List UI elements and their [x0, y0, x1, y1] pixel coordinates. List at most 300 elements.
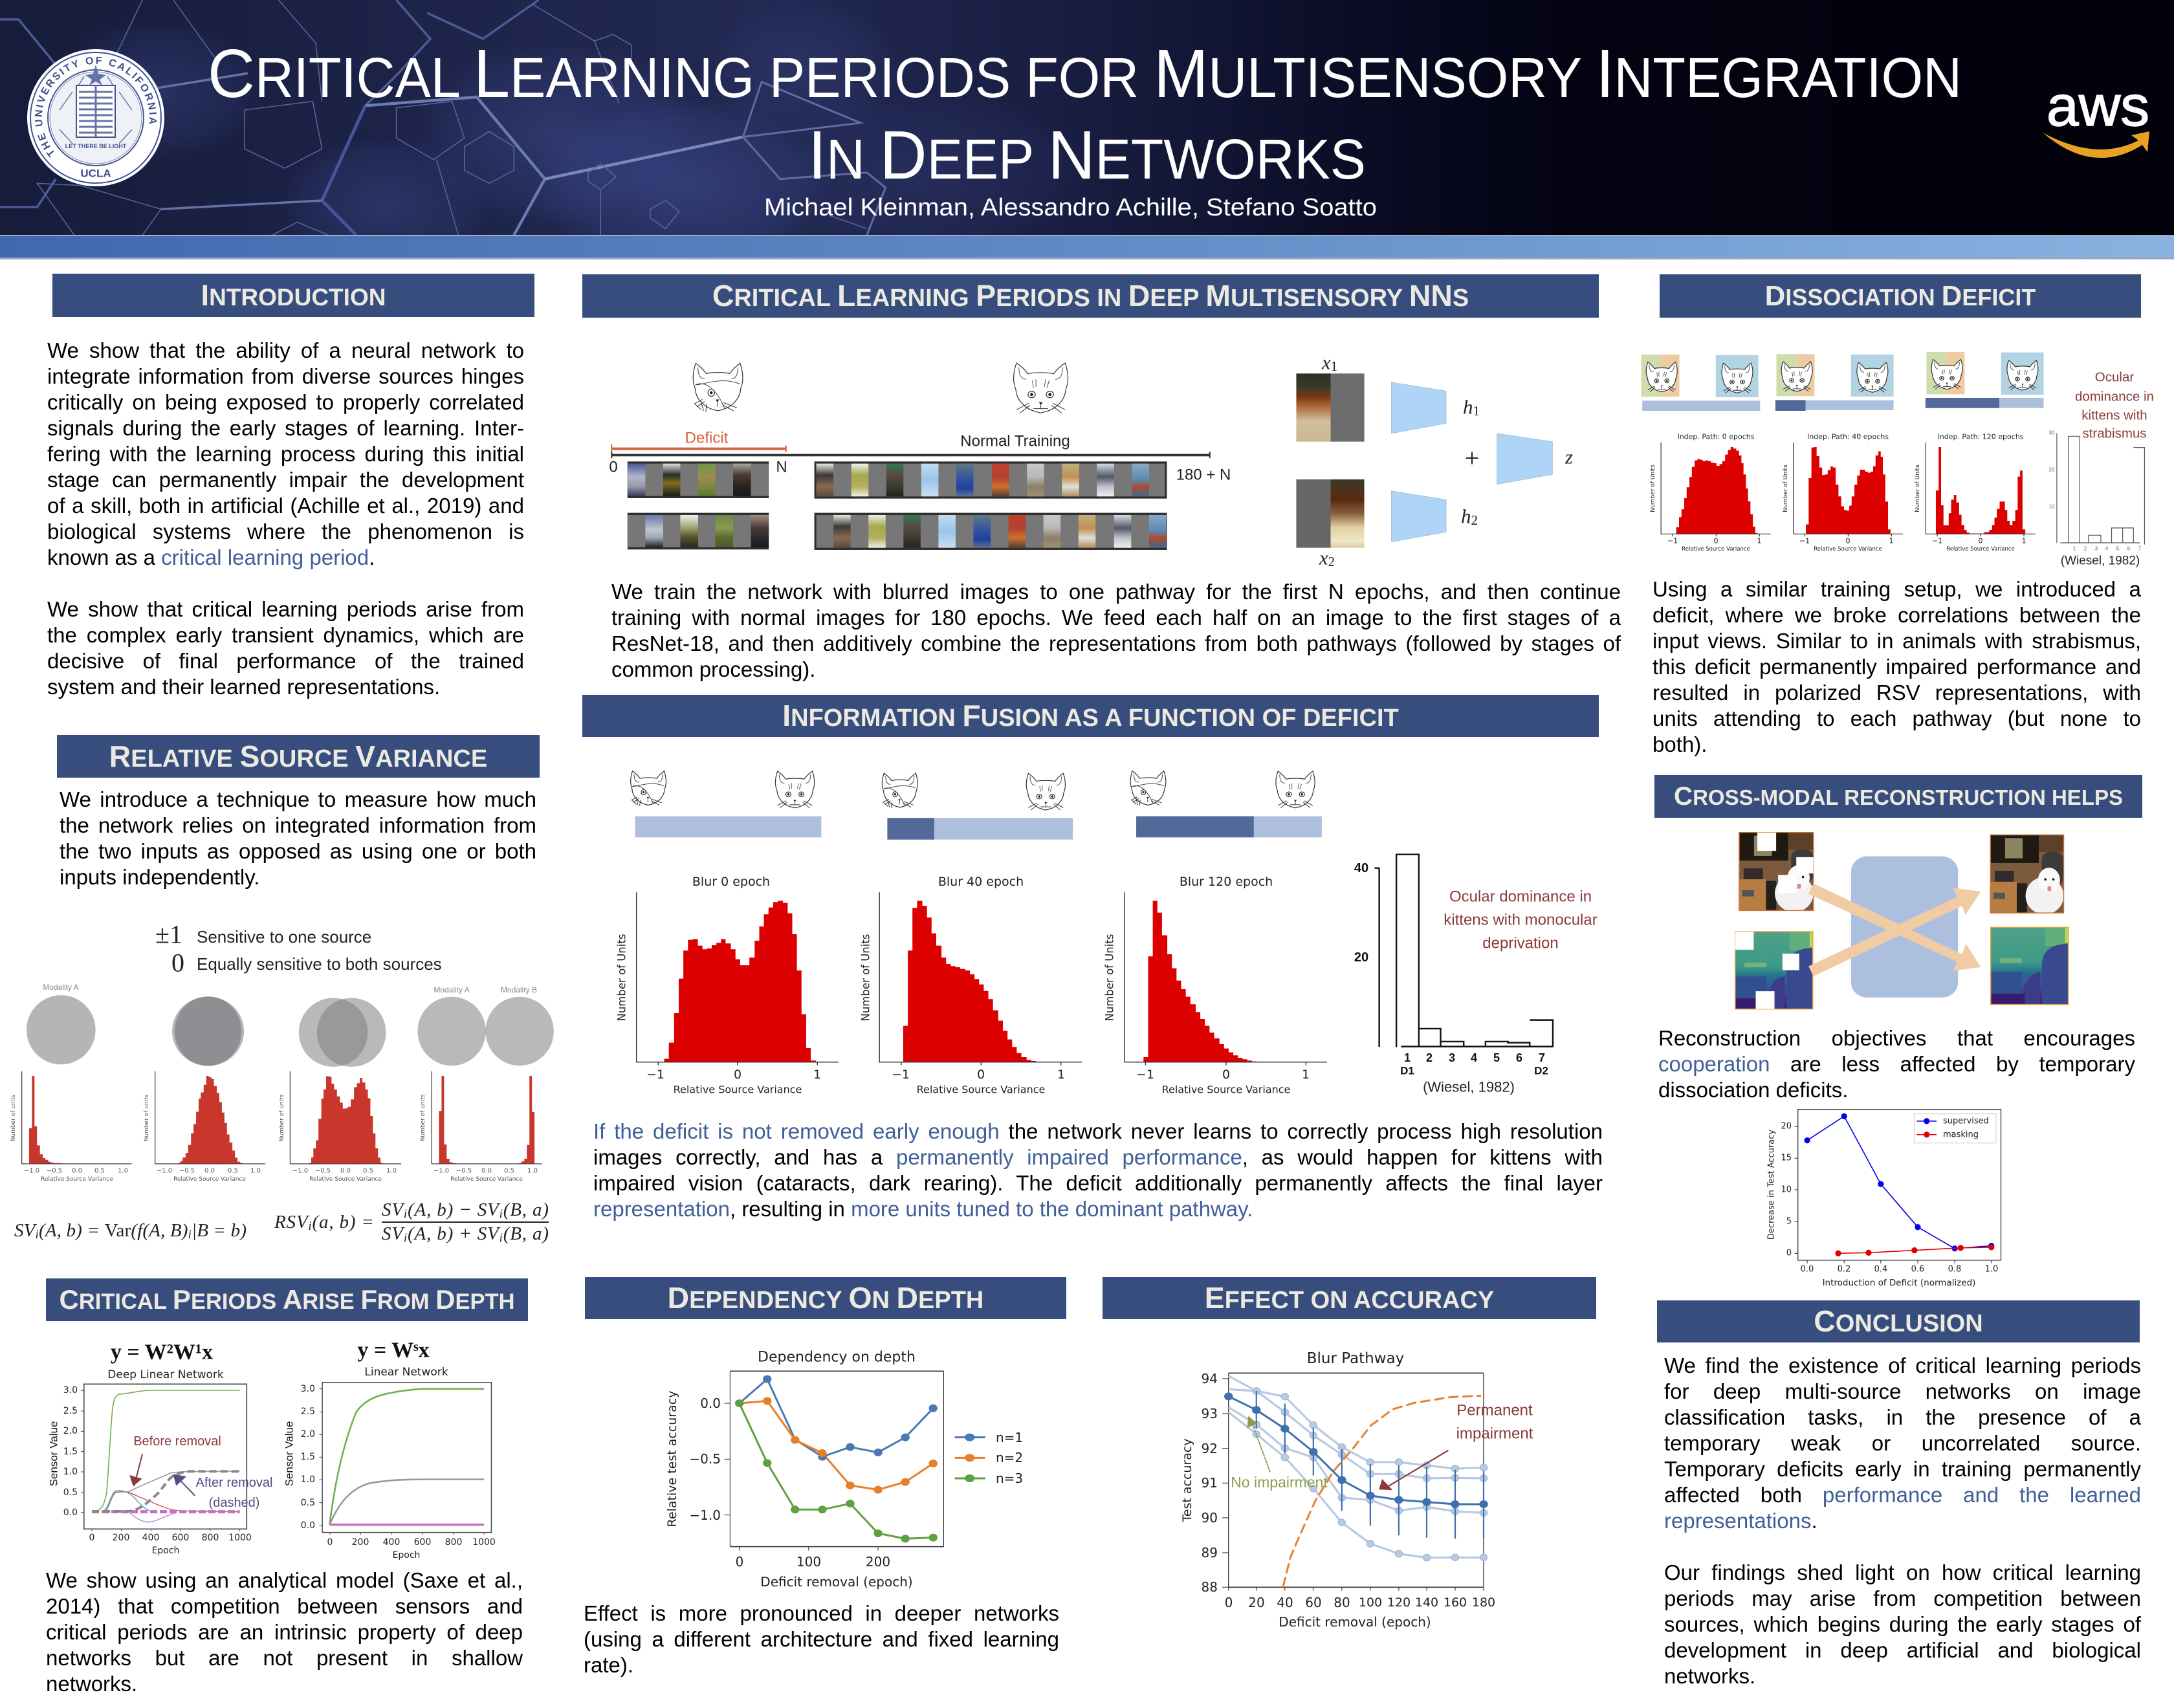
text block: conclusion: temporary weak or uncorrelated source. [1664, 1431, 2141, 1455]
line chart: decrease in test accuracy: masking [1943, 1130, 1979, 1140]
timeline labels: Normal Training [960, 432, 1070, 450]
text block: dissociation deficit: units attending to each pathway (but none to [1652, 706, 2141, 730]
chart: linear network: 1.0 [301, 1474, 315, 1485]
legend: RSV meaning: ±1 [155, 920, 182, 948]
callout: ocular dominance monocular: deprivation [1482, 934, 1559, 952]
text block: introduction: of a skill, both in artificial (Achille et al., 2019) and [47, 494, 524, 518]
strabismus chart labels: 6 [2127, 546, 2131, 551]
formula: relative source variance: SV [382, 1223, 403, 1244]
dissociation chart labels: 1 [1889, 537, 1893, 545]
chart labels: 0 [1222, 1068, 1230, 1082]
network labels: h [1463, 396, 1473, 418]
mini RSV histograms: 0.5 [363, 1167, 373, 1175]
chart: dependency on depth: 200 [866, 1554, 890, 1570]
text block: introduction: system and their learned representations. [47, 675, 440, 699]
text block: dependency on depth [584, 1601, 1059, 1677]
chart: deep linear network: (dashed) [209, 1496, 259, 1510]
legend: RSV meaning: Sensitive to one source [197, 927, 371, 947]
mini RSV histograms: Relative Source Variance [450, 1176, 523, 1183]
text block: conclusion: representations. [1664, 1509, 1817, 1533]
formula: source variance: (A, b) = [39, 1220, 104, 1241]
mini RSV histograms: −0.5 [456, 1167, 472, 1175]
line chart: decrease in test accuracy: 10 [1781, 1185, 1792, 1194]
text block: introduction: critically on being exposed to properly correlated [47, 390, 524, 414]
chart: deep linear network: 2.5 [63, 1406, 78, 1416]
chart: effect on accuracy, blur pathway: 92 [1202, 1441, 1218, 1456]
chart: linear network: 200 [352, 1537, 369, 1548]
text block: introduction: known as a critical learning period. [47, 545, 375, 569]
text block: conclusion: periods may arise from competition between [1664, 1586, 2141, 1610]
kitten chart labels: 4 [1471, 1051, 1477, 1064]
text block: introduction: integrate information from diverse sources hinges [47, 364, 524, 388]
dissociation chart labels: Number of Units [1783, 465, 1789, 512]
chart labels: Blur 120 epoch [1180, 875, 1273, 889]
text block: cross-modal: dissociation deficits. [1658, 1078, 1848, 1102]
line chart: decrease in test accuracy: 0.6 [1911, 1264, 1924, 1275]
strabismus chart labels: 5 [2116, 546, 2120, 551]
dissociation chart labels [1650, 432, 2026, 553]
mini RSV histograms: −0.5 [47, 1167, 62, 1175]
chart: dependency on depth: n=3 [996, 1471, 1023, 1486]
chart: linear network: Epoch [393, 1550, 420, 1560]
kitten ocular dominance chart [1374, 855, 1553, 1047]
image: masked RGB input [1739, 833, 1814, 912]
dissociation chart labels: Relative Source Variance [1682, 546, 1750, 553]
line chart: decrease in test accuracy: 15 [1781, 1153, 1792, 1163]
text block: critical periods [46, 1568, 523, 1696]
chart: deep linear network: Before removal [133, 1434, 221, 1449]
figure: dissociation deficit [1641, 352, 2154, 568]
dissociation chart labels: 0 [1979, 537, 1982, 545]
formula: shallow network: y = Wˢx [357, 1338, 430, 1363]
formula: relative source variance [274, 1199, 549, 1245]
mini RSV histograms: Relative Source Variance [309, 1176, 382, 1183]
chart: linear network: 800 [445, 1537, 462, 1548]
encoders and head [1391, 382, 1552, 542]
text block: introduction: We show that the ability of a neural network to [47, 338, 524, 362]
line chart: decrease in test accuracy: Decrease in Test Accuracy [1766, 1130, 1777, 1240]
strabismus ocular dominance chart [2057, 433, 2144, 545]
text block: relative source variance: the network relies on integrated information from [60, 813, 536, 837]
strabismus chart labels: 7 [2138, 546, 2142, 551]
mini RSV histograms: 0.0 [481, 1167, 492, 1175]
heading: Dependency On Depth: DEPENDENCY ON DEPTH [668, 1281, 983, 1315]
venn diagrams [27, 983, 554, 1067]
icon: colored cats 40 [1777, 354, 1894, 397]
chart: deep linear network [48, 1368, 272, 1556]
chart labels: 0 [734, 1068, 741, 1082]
callout: ocular dominance strabismus: dominance in [2075, 389, 2154, 404]
chart: deep linear network: Sensor Value [48, 1421, 60, 1486]
mini RSV histograms: 0.0 [72, 1167, 82, 1175]
line chart: decrease in test accuracy: 1.0 [1985, 1264, 1998, 1275]
kitten chart labels: D2 [1534, 1065, 1548, 1077]
text block: training setup: common processing). [611, 657, 815, 681]
chart labels: Blur 0 epoch [692, 875, 770, 889]
chart labels: 0 [977, 1068, 985, 1082]
authors: Michael Kleinman, Alessandro Achille, Stefano Soatto [764, 194, 1377, 221]
chart: linear network: Linear Network [364, 1366, 448, 1379]
chart: effect on accuracy, blur pathway: 160 [1444, 1595, 1467, 1610]
text block: information fusion: representation, resulting in more units tuned to the dominant pathway. [593, 1197, 1253, 1221]
network labels: 2 [1328, 554, 1335, 569]
callout: ocular dominance monocular: Ocular dominance in [1449, 888, 1592, 906]
line chart: decrease in test accuracy: 0.0 [1801, 1264, 1814, 1275]
venn diagrams: Modality A [434, 985, 470, 994]
mini RSV histograms: −1.0 [434, 1167, 449, 1175]
timeline labels: N [776, 458, 787, 476]
formula: source variance: SV [14, 1220, 35, 1241]
mini RSV histograms: −0.5 [179, 1167, 195, 1175]
formula: source variance: Var(f(A, B) [105, 1220, 188, 1241]
chart: linear network: 400 [383, 1537, 400, 1548]
line chart: decrease in test accuracy: supervised [1943, 1117, 1989, 1126]
text block: conclusion: networks. [1664, 1664, 1755, 1688]
mini RSV histograms: 1.0 [386, 1167, 397, 1175]
network labels: 1 [1473, 403, 1480, 419]
mini RSV histograms: 0.5 [228, 1167, 238, 1175]
text block: critical periods: 2014) that competition between sensors and [46, 1594, 523, 1618]
dissociation chart labels: 0 [1845, 537, 1850, 545]
deficit bars [1642, 398, 2044, 411]
heading: Critical Learning Periods in Deep Multisensory NNs [582, 274, 1599, 318]
input x2 [1296, 479, 1365, 548]
formula: relative source variance: (A, b) + SV [408, 1223, 501, 1244]
chart: linear network: 600 [414, 1537, 431, 1548]
text block: information fusion [593, 1119, 1603, 1221]
formula: relative source variance: i [500, 1231, 503, 1245]
formula: source variance: |B = b) [192, 1220, 247, 1241]
chart: effect on accuracy, blur pathway: 0 [1225, 1595, 1233, 1610]
histograms [1676, 447, 2025, 534]
heading: Introduction: INTRODUCTION [201, 279, 386, 312]
chart: effect on accuracy, blur pathway: Deficit removal (epoch) [1279, 1614, 1431, 1630]
icon: cats blur 0 [631, 771, 815, 808]
chart: dependency on depth: Dependency on depth [758, 1350, 916, 1365]
chart: deep linear network: 200 [113, 1533, 129, 1543]
chart: effect on accuracy, blur pathway: impairment [1456, 1425, 1533, 1443]
text block: introduction: the complex early transient dynamics, which are [47, 623, 524, 647]
mini RSV histograms: 0.5 [94, 1167, 105, 1175]
figure: two-pathway network diagram [1296, 351, 1573, 569]
heading: Dissociation Deficit [1660, 274, 2141, 318]
chart: deep linear network: Deep Linear Network [107, 1368, 224, 1381]
formula: deep network: y = W²W¹x [111, 1341, 213, 1364]
arrow: depth to RGB [1808, 888, 1981, 976]
text block: training setup: We train the network with blurred images to one pathway for the first N epochs, and then continue [611, 580, 1621, 604]
kitten chart labels: D1 [1400, 1065, 1414, 1077]
venn diagrams: Modality B [501, 985, 537, 994]
timeline labels [609, 430, 1231, 484]
kitten chart labels: 40 [1354, 861, 1368, 875]
strabismus chart labels [2049, 430, 2142, 568]
strabismus chart labels: (Wiesel, 1982) [2061, 554, 2140, 568]
mini RSV histograms: Number of units [144, 1094, 150, 1141]
chart labels: 1 [813, 1068, 821, 1082]
mini RSV histograms: 0.5 [504, 1167, 514, 1175]
dissociation chart labels: −1 [1667, 537, 1678, 545]
chart: effect on accuracy, blur pathway: Permanent [1456, 1401, 1533, 1419]
chart: deep linear network: 0.0 [63, 1507, 78, 1518]
callout: ocular dominance strabismus: Ocular [2095, 370, 2134, 384]
icon: normal cat [1014, 363, 1068, 413]
dissociation chart labels: 0 [1713, 537, 1718, 545]
text block: information fusion: images correctly, and has a permanently impaired performance, as would happen for kittens with [593, 1145, 1603, 1169]
chart labels: Number of Units [616, 934, 628, 1021]
title: IN DEEP NETWORKS [808, 117, 1366, 193]
formula: relative source variance: i [404, 1231, 407, 1245]
dissociation chart labels: Relative Source Variance [1814, 546, 1882, 553]
text block: introduction: stage can permanently impair the development [47, 468, 524, 492]
icon: UCLA seal: UCLA [80, 167, 111, 180]
callout: ocular dominance monocular: kittens with monocular [1444, 911, 1598, 929]
strabismus chart labels: 20 [2049, 467, 2055, 472]
chart: deep linear network: 400 [142, 1533, 159, 1543]
icon: UCLA seal: THE UNIVERSITY OF CALIFORNIA [35, 57, 157, 158]
icon: UCLA seal [27, 49, 164, 186]
chart: effect on accuracy, blur pathway: 88 [1202, 1579, 1218, 1595]
text block: dissociation deficit [1652, 577, 2141, 756]
figure: relative source variance [10, 920, 554, 1245]
image strips: normal training [815, 461, 1167, 550]
chart labels [616, 875, 1310, 1096]
network labels: x [1322, 351, 1331, 374]
chart: effect on accuracy, blur pathway: Test accuracy [1180, 1438, 1194, 1523]
arrow: RGB to depth [1808, 883, 1981, 970]
text block: cross-modal [1658, 1026, 2135, 1102]
text block: introduction [47, 338, 524, 699]
timeline axis [611, 452, 1211, 458]
image: reconstructed RGB [1990, 835, 2063, 914]
text block: conclusion: We find the existence of critical learning periods [1664, 1353, 2141, 1377]
callout: ocular dominance strabismus: strabismus [2082, 426, 2147, 441]
text block: introduction: biological systems where the phenomenon is [47, 520, 524, 543]
text block: relative source variance [60, 787, 536, 889]
figure: training timeline with deficit [609, 363, 1231, 550]
line chart: decrease in test accuracy: 0.2 [1838, 1264, 1850, 1275]
network labels: h [1461, 505, 1471, 528]
title: CRITICAL LEARNING PERIODS FOR MULTISENSORY INTEGRATION [208, 36, 1962, 112]
text block: critical periods: networks but are not present in shallow [46, 1646, 523, 1670]
text block: dependency on depth: rate). [584, 1653, 633, 1677]
heading: Relative Source Variance [57, 735, 540, 778]
heading: Introduction [52, 274, 534, 317]
formula: relative source variance: (B, a) [503, 1199, 549, 1220]
chart: linear network: 0.5 [301, 1498, 315, 1508]
mini RSV histograms: 0.0 [204, 1167, 215, 1175]
icon: cats blur 120 [1130, 771, 1315, 808]
kitten chart labels: 6 [1516, 1051, 1522, 1064]
deficit bars [635, 816, 1322, 840]
formula: source variance: i [188, 1228, 192, 1241]
figure: information fusion histograms [616, 771, 1598, 1096]
icon: aws logo: aws [2047, 74, 2149, 138]
chart: effect on accuracy, blur pathway: 20 [1248, 1595, 1265, 1610]
chart: deep linear network: 2.0 [63, 1426, 78, 1436]
line chart: decrease in test accuracy: Introduction of Deficit (normalized) [1823, 1278, 1975, 1288]
text block: introduction: signals during the early stages of learning. Inter- [47, 416, 524, 440]
chart: linear network: 3.0 [301, 1384, 315, 1394]
strabismus chart labels: 3 [2095, 546, 2098, 551]
timeline labels: Deficit [685, 430, 729, 446]
figure: cross-modal reconstruction [1735, 833, 2069, 1009]
legend: RSV meaning [155, 920, 442, 977]
kitten chart labels: 7 [1539, 1051, 1545, 1064]
chart: effect on accuracy, blur pathway: 94 [1202, 1371, 1218, 1386]
image: masked depth input [1735, 932, 1813, 1009]
chart: linear network: 0 [327, 1537, 333, 1548]
chart: dependency on depth: Relative test accuracy [665, 1391, 679, 1527]
chart: effect on accuracy, blur pathway: 89 [1202, 1545, 1218, 1560]
chart: effect on accuracy, blur pathway: Blur Pathway [1307, 1350, 1404, 1367]
line chart: decrease in test accuracy: 20 [1781, 1122, 1792, 1131]
line chart: decrease in test accuracy: 5 [1786, 1216, 1792, 1227]
mini RSV histograms: Relative Source Variance [41, 1176, 113, 1183]
heading: Dependency On Depth [585, 1277, 1066, 1319]
text block: conclusion: affected both performance and the learned [1664, 1483, 2141, 1507]
timeline labels: 180 + N [1176, 466, 1231, 484]
chart: effect on accuracy, blur pathway: 120 [1387, 1595, 1411, 1610]
mini RSV histograms: Relative Source Variance [173, 1176, 246, 1183]
chart: dependency on depth: n=1 [996, 1430, 1023, 1445]
chart: dependency on depth: n=2 [996, 1450, 1023, 1465]
text block: introduction: We show that critical learning periods arise from [47, 597, 524, 621]
heading: Relative Source Variance: RELATIVE SOURCE VARIANCE [109, 739, 487, 773]
mini RSV histograms: 1.0 [527, 1167, 538, 1175]
heading: Critical Periods Arise From Depth [46, 1278, 528, 1321]
chart: linear network: 2.5 [301, 1407, 315, 1417]
formula: relative source variance: i [308, 1219, 312, 1233]
chart labels: −1 [1136, 1068, 1154, 1082]
heading: Dissociation Deficit: DISSOCIATION DEFICIT [1765, 280, 2036, 312]
chart: linear network: 1000 [472, 1537, 496, 1548]
chart: deep linear network: 0.5 [63, 1487, 78, 1498]
chart: deep linear network: 3.0 [63, 1385, 78, 1396]
text block: conclusion: development in deep artificial and biological [1664, 1638, 2141, 1662]
timeline labels: 0 [609, 458, 618, 476]
icon: UCLA seal: LET THERE BE LIGHT [65, 143, 127, 149]
text block: conclusion: for deep multi-source networks on image [1664, 1379, 2141, 1403]
text block: conclusion: classification tasks, in the presence of a [1664, 1405, 2141, 1429]
kitten chart labels: 5 [1493, 1051, 1500, 1064]
text block: training setup: ResNet-18, and then additively combine the representations from both pathways (followed by stages of [611, 631, 1621, 655]
mini RSV histograms: Number of units [420, 1094, 426, 1141]
chart labels: Number of Units [1104, 934, 1115, 1021]
chart: dependency on depth: 100 [796, 1554, 821, 1570]
icon: cats blur 40 [882, 773, 1065, 810]
line chart: decrease in test accuracy: 0.8 [1948, 1264, 1961, 1275]
chart labels: Relative Source Variance [1162, 1083, 1290, 1096]
chart: dependency on depth: Deficit removal (epoch) [760, 1574, 913, 1590]
callout: ocular dominance monocular [1444, 888, 1598, 952]
text block: training setup: training with normal images for 180 epochs. We feed each half on an image to the first stages of a [611, 606, 1621, 630]
chart: effect on accuracy, blur pathway: 91 [1202, 1475, 1218, 1491]
text block: dependency on depth: (using a different architecture and fixed learning [584, 1627, 1059, 1651]
line chart: decrease in test accuracy: 0.4 [1874, 1264, 1887, 1275]
formula: source variance: i [36, 1228, 39, 1241]
text block: dissociation deficit: deficit, where we broke correlations between the [1652, 603, 2141, 627]
text block: relative source variance: We introduce a technique to measure how much [60, 787, 536, 811]
dissociation chart labels: 1 [1757, 537, 1761, 545]
mini RSV histograms: −0.5 [315, 1167, 331, 1175]
text block: conclusion [1664, 1353, 2142, 1688]
heading: Critical Periods Arise From Depth: CRITICAL PERIODS ARISE FROM DEPTH [59, 1284, 515, 1315]
text block: dissociation deficit: resulted in polarized RSV representations, with [1652, 681, 2141, 705]
formula: relative source variance: (a, b) = [313, 1212, 374, 1232]
chart labels: Relative Source Variance [674, 1083, 802, 1096]
chart: effect on accuracy, blur pathway: 93 [1202, 1406, 1218, 1421]
text block: cross-modal: Reconstruction objectives that encourages [1658, 1026, 2135, 1050]
chart labels: −1 [892, 1068, 910, 1082]
dissociation chart labels: Number of Units [1650, 465, 1656, 512]
header banner background [0, 0, 2174, 235]
text block: information fusion: impaired vision (cataracts, dark rearing). The deficit additionally permanently affects the final layer [593, 1171, 1603, 1195]
chart: effect on accuracy, blur pathway: No impairment [1231, 1474, 1328, 1491]
strabismus chart labels: 2 [2084, 546, 2087, 551]
text block: introduction: decisive of final performance of the trained [47, 649, 524, 673]
chart labels: 1 [1302, 1068, 1310, 1082]
kitten chart labels: 1 [1404, 1051, 1411, 1064]
kitten chart labels: 2 [1426, 1051, 1433, 1064]
formula: relative source variance: i [500, 1207, 503, 1220]
network labels [1319, 351, 1573, 569]
text block: dissociation deficit: input views. Similar to in animals with strabismus, [1652, 629, 2141, 653]
chart: deep linear network: 0 [89, 1533, 94, 1543]
chart: linear network [283, 1366, 496, 1560]
heading: Cross-modal reconstruction helps: CROSS-MODAL RECONSTRUCTION HELPS [1674, 782, 2123, 811]
input x1 [1296, 373, 1365, 442]
text block: training setup [611, 580, 1621, 681]
network labels: x [1319, 546, 1328, 569]
image: reconstructed depth [1991, 927, 2069, 1005]
text block: dissociation deficit: both). [1652, 732, 1707, 756]
text block: conclusion: Temporary deficits early in training permanently [1664, 1457, 2141, 1481]
formula: relative source variance: RSV [274, 1212, 308, 1232]
chart: linear network: 2.0 [301, 1429, 315, 1440]
formula: relative source variance: (B, a) [503, 1223, 549, 1244]
dissociation chart labels: Relative Source Variance [1946, 546, 2015, 553]
mini RSV histograms: −1.0 [157, 1167, 172, 1175]
chart: deep linear network: 1.0 [63, 1467, 78, 1477]
dissociation chart labels: −1 [1799, 537, 1810, 545]
dissociation chart labels: Indep. Path: 40 epochs [1807, 432, 1889, 441]
text block: conclusion: sources, which begins during the early stages of [1664, 1612, 2141, 1636]
heading: Critical Learning Periods in Deep Multisensory NNs: CRITICAL LEARNING PERIODS IN DEEP MULTISENSORY NNS [712, 279, 1469, 312]
chart labels: Blur 40 epoch [938, 875, 1024, 889]
chart: effect on accuracy, blur pathway: 90 [1202, 1510, 1218, 1526]
histograms [664, 901, 1257, 1062]
chart: deep linear network: 1.5 [63, 1447, 78, 1457]
chart: deep linear network: Epoch [152, 1546, 179, 1556]
mini RSV histograms [10, 1071, 542, 1183]
heading: Effect on accuracy: EFFECT ON ACCURACY [1205, 1281, 1494, 1315]
line chart: decrease in test accuracy [1766, 1110, 2001, 1288]
shared model block [1851, 857, 1958, 998]
text block: critical periods: critical periods are an intrinsic property of deep [46, 1620, 523, 1644]
heading: Information Fusion as a function of deficit [582, 695, 1599, 737]
dissociation chart labels: Indep. Path: 0 epochs [1677, 432, 1755, 441]
image strips: deficit [628, 461, 769, 549]
title [208, 36, 1962, 193]
chart: linear network: 1.5 [301, 1452, 315, 1462]
mini RSV histograms: 0.0 [340, 1167, 351, 1175]
chart: effect on accuracy, blur pathway [1180, 1350, 1533, 1630]
dissociation chart labels: Number of Units [1915, 465, 1921, 512]
callout: ocular dominance strabismus [2075, 370, 2154, 441]
chart: effect on accuracy, blur pathway: 80 [1334, 1595, 1350, 1610]
network labels: z [1565, 445, 1573, 468]
text block: dependency on depth: Effect is more pronounced in deeper networks [584, 1601, 1059, 1625]
